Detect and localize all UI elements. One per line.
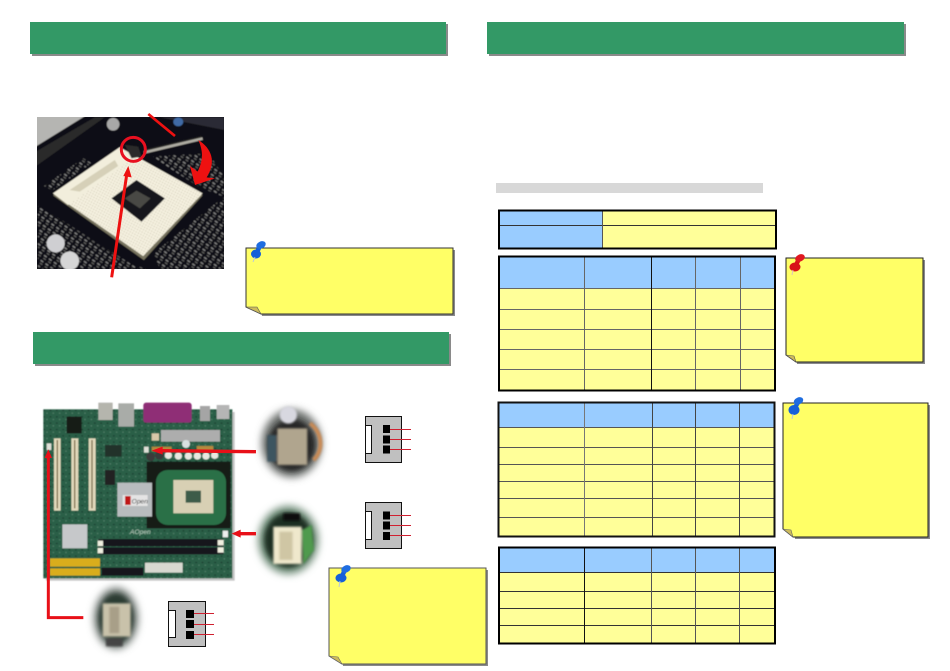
header bar: middle left [33,332,451,366]
table: summary [499,210,776,248]
connector diagram: CPU fan [366,416,411,462]
icon: blue pushpin [251,240,267,262]
header bar: top right [487,22,906,56]
icon: red pushpin [790,253,806,275]
sticky note: fan connectors [329,568,488,666]
table: second specification [498,402,775,537]
sticky note: red warning [786,258,925,364]
red pointer arrow: socket pin [112,166,132,277]
photo inset: CPU fan connector [262,406,322,477]
red circle marking pin [121,137,145,161]
table: third specification [499,548,775,644]
section label bar [496,183,763,193]
photo: motherboard: AOpen [129,529,151,536]
photo: motherboard [43,403,235,581]
red pointer line: lever [148,114,175,136]
red arrow: system fan [232,530,256,538]
connector diagram: auxiliary fan [168,602,214,646]
icon: blue pushpin [336,564,352,587]
table: first specification [499,256,775,391]
photo: motherboard: Open [132,498,148,505]
sticky note: lever tip [246,248,455,316]
icon: blue pushpin [788,396,805,419]
header bar: top left [30,22,448,56]
photo inset: system fan connector [258,506,318,574]
connector diagram: system fan [366,502,411,548]
sticky note: blue tip [783,403,930,539]
photo inset: auxiliary fan connector [94,588,138,649]
red arrow: CPU fan [152,447,256,455]
red arrow: auxiliary fan [45,449,83,618]
photo: CPU socket with lever [33,113,230,273]
red rotation arrow on lever [190,140,215,185]
